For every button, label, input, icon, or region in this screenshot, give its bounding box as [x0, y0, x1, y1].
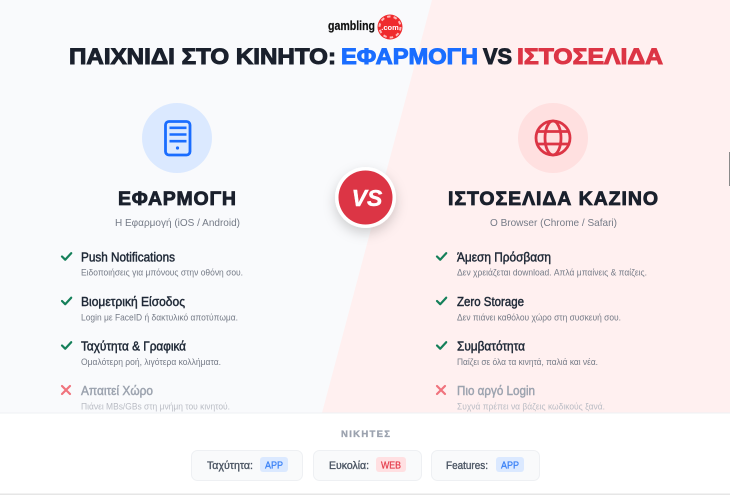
- VS badge: VS: [352, 185, 383, 211]
- winner card: speed: APP: [265, 460, 283, 472]
- feature: biometric login: Login με FaceID ή δακτυλικό αποτύπωμα.: [81, 312, 238, 324]
- subtitle: app: Η Εφαρμογή (iOS / Android): [115, 217, 240, 229]
- background: website side: [322, 0, 730, 413]
- feature: requires space: [62, 384, 230, 412]
- title: ΕΦΑΡΜΟΓΗ: [341, 44, 478, 69]
- scrollbar sliver: [729, 152, 730, 186]
- icon: phone: [142, 103, 212, 173]
- heading: app: ΕΦΑΡΜΟΓΗ: [118, 188, 236, 210]
- feature: requires space: Πιάνει MBs/GBs στη μνήμη του κινητού.: [81, 402, 230, 412]
- feature: requires space: Απαιτεί Χώρο: [81, 384, 153, 398]
- feature: biometric login: Βιομετρική Είσοδος: [81, 295, 185, 309]
- feature: instant access: Δεν χρειάζεται download. Απλά μπαίνεις & παίζεις.: [457, 268, 647, 278]
- feature: slower login: Συχνά πρέπει να βάζεις κωδικούς ξανά.: [457, 402, 605, 412]
- feature: zero storage: Zero Storage: [457, 295, 524, 309]
- heading: website: ΙΣΤΟΣΕΛΙΔΑ ΚΑΖΙΝΟ: [448, 188, 658, 210]
- title: ΙΣΤΟΣΕΛΙΔΑ: [517, 44, 663, 69]
- icon: globe: [518, 103, 588, 173]
- winner card: ease: Ευκολία:: [329, 460, 369, 472]
- feature: compatibility: Παίζει σε όλα τα κινητά, παλιά και νέα.: [457, 357, 598, 368]
- logo: [328, 14, 402, 40]
- feature: compatibility: [437, 340, 598, 368]
- title: [69, 44, 663, 69]
- winner card: ease: [314, 450, 422, 480]
- logo: gambling: [328, 19, 375, 33]
- footer heading: ΝΙΚΗΤΕΣ: [341, 429, 390, 440]
- winner card: ease: WEB: [381, 460, 401, 472]
- feature: slower login: [437, 384, 605, 412]
- feature: biometric login: [62, 295, 238, 324]
- logo: .com: [381, 23, 399, 32]
- feature: instant access: Άμεση Πρόσβαση: [457, 250, 551, 264]
- feature: zero storage: Δεν πιάνει καθόλου χώρο στη συσκευή σου.: [457, 312, 621, 324]
- panel: app: [62, 103, 243, 412]
- winner card: speed: [192, 450, 302, 480]
- feature: speed and graphics: [62, 340, 221, 368]
- feature: speed and graphics: Ταχύτητα & Γραφικά: [81, 340, 186, 354]
- feature: push notifications: Ειδοποιήσεις για μπόνους στην οθόνη σου.: [81, 268, 243, 278]
- feature: speed and graphics: Ομαλότερη ροή, λιγότερα κολλήματα.: [81, 357, 221, 368]
- feature: slower login: Πιο αργό Login: [457, 384, 535, 398]
- feature: instant access: [437, 250, 647, 278]
- footer panel: [0, 412, 730, 495]
- winner card: features: [432, 450, 540, 480]
- feature: push notifications: [62, 250, 243, 278]
- subtitle: website: Ο Browser (Chrome / Safari): [490, 217, 617, 229]
- feature: push notifications: Push Notifications: [81, 250, 175, 264]
- feature: compatibility: Συμβατότητα: [457, 340, 525, 354]
- title: VS: [483, 44, 512, 69]
- VS badge: [335, 167, 396, 228]
- feature: zero storage: [437, 295, 621, 324]
- panel: website: [437, 103, 658, 412]
- winner card: features: APP: [501, 460, 519, 472]
- winner card: speed: Ταχύτητα:: [207, 460, 253, 472]
- title: ΠΑΙΧΝΙΔΙ ΣΤΟ ΚΙΝΗΤΟ:: [69, 44, 336, 69]
- winner card: features: Features:: [446, 460, 488, 472]
